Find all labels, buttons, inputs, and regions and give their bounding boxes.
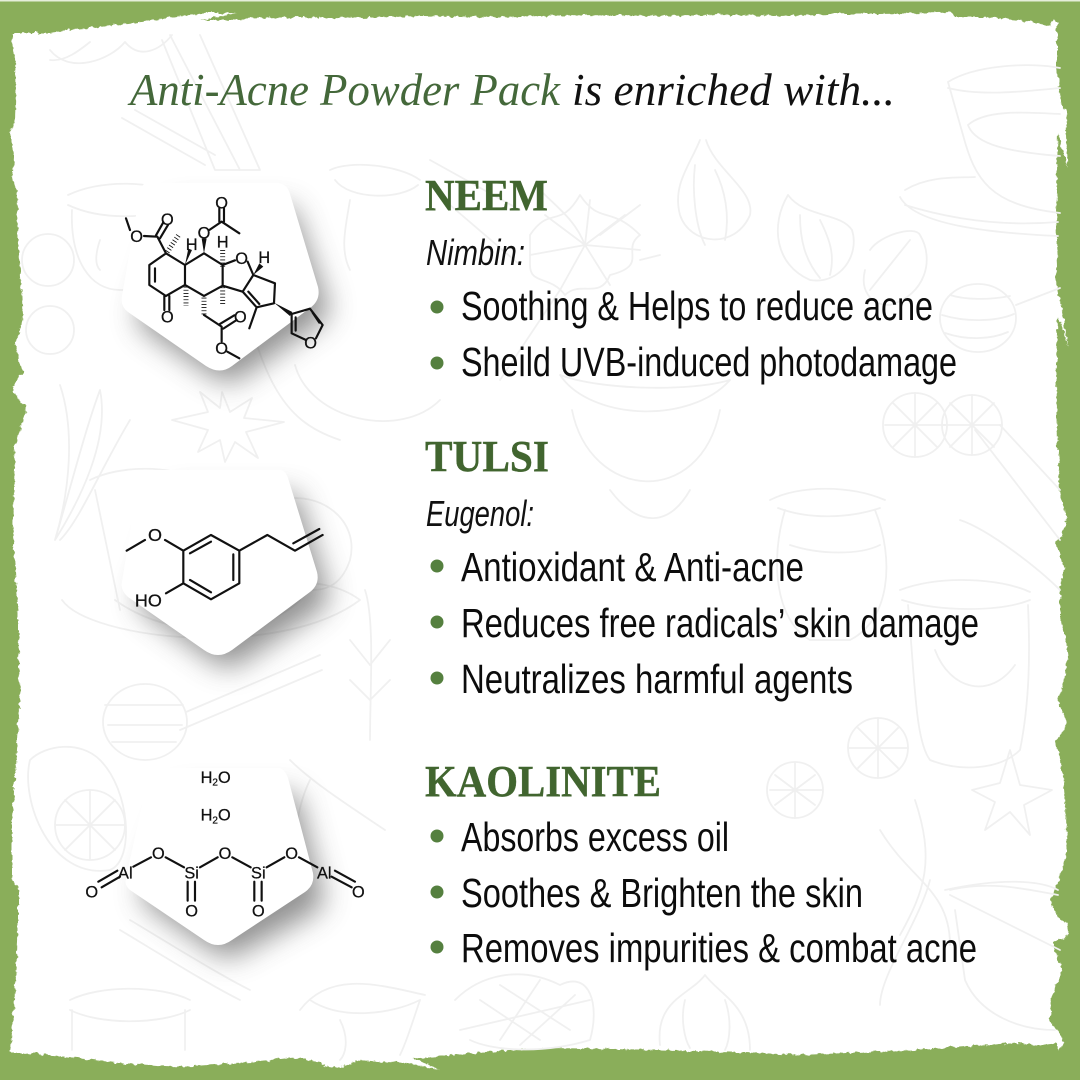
panel: kaolinite molecule card	[85, 768, 365, 957]
section: neem	[425, 171, 957, 385]
icon: nimbin structure: H	[258, 249, 270, 267]
panel: tulsi molecule card	[122, 470, 328, 667]
bullet list: tulsi benefits	[430, 544, 979, 702]
icon: kaolinite structure	[85, 769, 365, 920]
icon: nimbin structure: O	[130, 228, 143, 246]
icon: nimbin structure: O	[304, 334, 317, 352]
section: kaolinite	[425, 757, 977, 971]
icon: kaolinite structure: O	[285, 845, 298, 863]
icon: nimbin structure: O	[161, 211, 174, 229]
icon: eugenol structure	[127, 525, 323, 610]
section: tulsi	[425, 432, 979, 702]
icon: nimbin structure: O	[215, 340, 228, 358]
icon: kaolinite structure: 2	[212, 778, 218, 789]
heading: neem: NEEM	[425, 171, 548, 220]
icon: eugenol structure: HO	[135, 590, 162, 610]
icon: kaolinite structure: O	[252, 902, 265, 920]
panel: neem molecule card	[122, 183, 328, 382]
icon: kaolinite structure: O	[218, 807, 231, 825]
bullet list: kaolinite benefits: Absorbs excess oil	[461, 814, 729, 860]
icon: kaolinite structure: O	[85, 883, 98, 901]
bullet list: tulsi benefits: Neutralizes harmful agents	[461, 656, 853, 702]
icon: kaolinite structure: Al	[118, 864, 133, 882]
icon: kaolinite structure: H	[201, 769, 212, 787]
bullet list: neem benefits	[430, 283, 957, 385]
icon: kaolinite structure: O	[352, 883, 365, 901]
heading: tulsi: TULSI	[425, 432, 549, 481]
bullet list: kaolinite benefits	[430, 814, 977, 971]
bullet list: neem benefits: Sheild UVB-induced photodamage	[461, 339, 957, 385]
subheading: eugenol: Eugenol:	[426, 493, 534, 534]
bullet list: neem benefits: Soothing & Helps to reduce acne	[461, 283, 933, 329]
icon: nimbin structure	[126, 194, 323, 358]
icon: kaolinite structure: Si	[184, 864, 199, 882]
top edge highlight	[0, 0, 1080, 2]
icon: nimbin structure: H	[217, 233, 229, 251]
icon: kaolinite structure: Al	[317, 864, 332, 882]
icon: eugenol structure: O	[148, 525, 162, 545]
icon: kaolinite structure: H	[201, 807, 212, 825]
bullet list: kaolinite benefits: Soothes & Brighten the skin	[461, 870, 863, 916]
icon: kaolinite structure: O	[219, 845, 231, 863]
icon: kaolinite structure: O	[218, 769, 231, 787]
icon: kaolinite structure: O	[152, 845, 165, 863]
title	[127, 65, 895, 115]
icon: nimbin structure: O	[234, 309, 247, 327]
bullet list: tulsi benefits: Antioxidant & Anti-acne	[461, 544, 804, 590]
icon: nimbin structure: O	[198, 225, 210, 243]
icon: kaolinite structure: Si	[251, 864, 266, 882]
icon: nimbin structure: O	[161, 309, 174, 327]
subheading: nimbin: Nimbin:	[426, 232, 525, 273]
title: is enriched with...	[572, 65, 895, 115]
icon: nimbin structure: H	[186, 236, 198, 254]
heading: kaolinite: KAOLINITE	[425, 757, 661, 806]
title: Anti-Acne Powder Pack	[127, 65, 561, 115]
icon: kaolinite structure: 2	[212, 815, 218, 826]
icon: nimbin structure: O	[235, 250, 248, 268]
icon: nimbin structure: O	[215, 194, 228, 212]
icon: kaolinite structure: O	[185, 902, 198, 920]
